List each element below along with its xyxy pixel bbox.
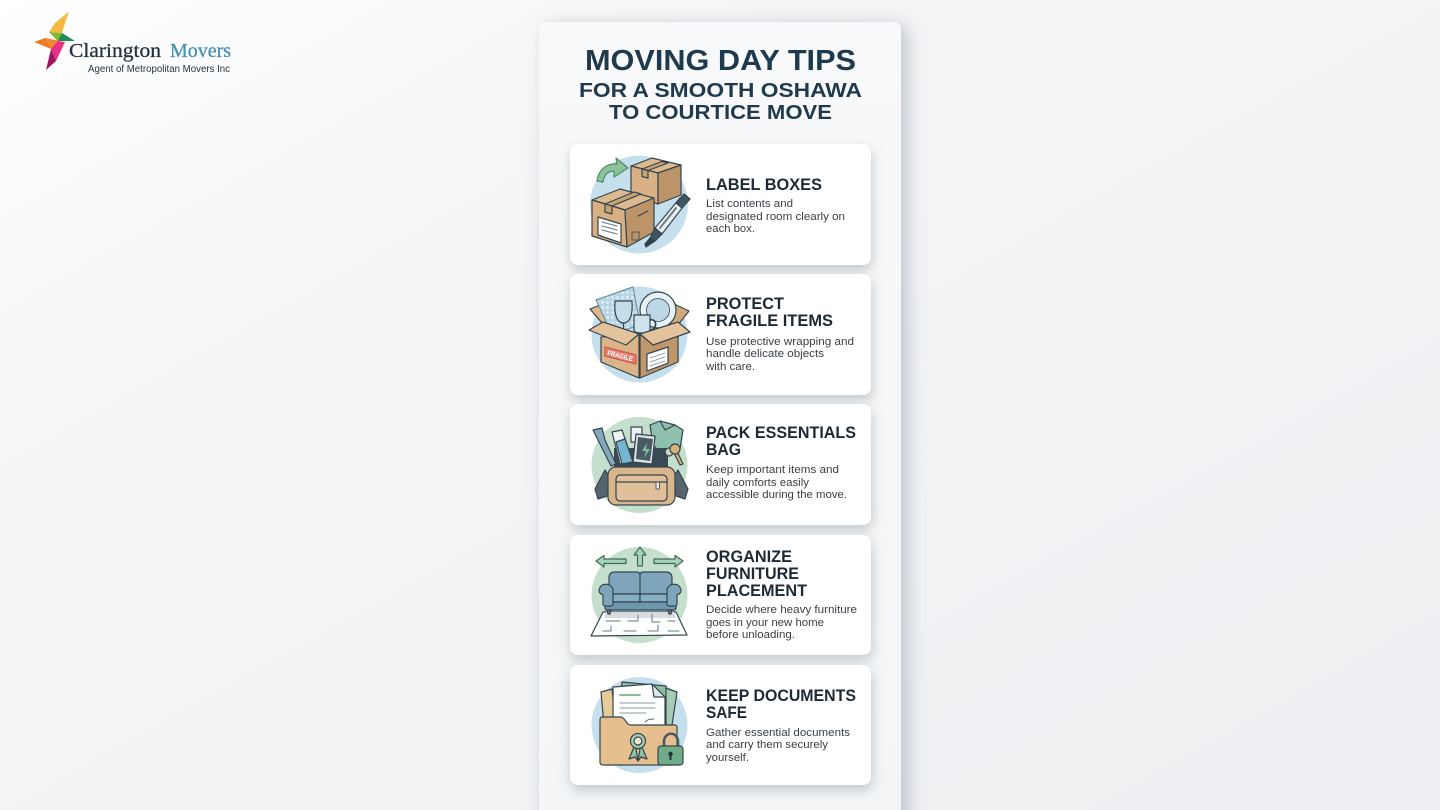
- logo name accent: Movers: [170, 40, 231, 62]
- description: [705, 336, 854, 373]
- icon: folder with documents and lock: [592, 677, 688, 773]
- description: [706, 727, 850, 764]
- description: Gather essential documents: [706, 727, 850, 739]
- arrow up: [634, 547, 646, 566]
- description: handle delicate objects: [706, 348, 824, 360]
- heading: FURNITURE: [706, 565, 799, 583]
- heading: [706, 424, 856, 459]
- card: organize furniture placement: [570, 535, 871, 655]
- panel: infographic sheet: [539, 22, 901, 810]
- description: yourself.: [706, 752, 749, 764]
- card: protect fragile items: [570, 274, 871, 395]
- description: designated room clearly on: [706, 211, 845, 223]
- description: goes in your new home: [706, 617, 824, 629]
- heading: PROTECT: [706, 295, 784, 313]
- heading: KEEP DOCUMENTS: [706, 687, 856, 705]
- logo tagline: Agent of Metropolitan Movers Inc: [88, 64, 230, 75]
- description: Decide where heavy furniture: [706, 604, 857, 616]
- card: pack essentials bag: [570, 404, 871, 525]
- heading: ORGANIZE: [706, 548, 792, 566]
- icon: open box with fragile items: FRAGILE: [607, 350, 634, 363]
- heading: PACK ESSENTIALS: [706, 424, 856, 442]
- heading: [706, 295, 833, 330]
- description: accessible during the move.: [706, 489, 847, 501]
- heading: PLACEMENT: [706, 582, 807, 600]
- card: label boxes: [570, 144, 871, 265]
- title line 1: MOVING DAY TIPS: [585, 45, 856, 77]
- icon: cardboard boxes and marker: [590, 156, 690, 254]
- heading: [706, 687, 856, 722]
- icon: open box with fragile items: [589, 286, 690, 382]
- description: before unloading.: [706, 629, 795, 641]
- description: [706, 604, 857, 641]
- icon: padlock: [658, 734, 683, 765]
- heading: FRAGILE ITEMS: [706, 312, 833, 330]
- logo name: Clarington: [69, 40, 161, 62]
- heading: BAG: [706, 441, 741, 459]
- description: List contents and: [706, 198, 793, 210]
- heading: LABEL BOXES: [706, 176, 822, 194]
- arrow left: [596, 556, 626, 567]
- icon: ribbon seal: [629, 734, 647, 761]
- description: Use protective wrapping and: [706, 336, 854, 348]
- description: [706, 198, 845, 235]
- icon: logo star: [34, 12, 75, 70]
- description: each box.: [706, 223, 755, 235]
- title line 3: TO COURTICE MOVE: [609, 101, 832, 124]
- heading: SAFE: [706, 704, 747, 722]
- description: [706, 464, 847, 501]
- description: and carry them securely: [706, 739, 828, 751]
- card: keep documents safe: [570, 665, 871, 785]
- title: [579, 45, 862, 124]
- arrow right: [654, 556, 683, 567]
- description: with care.: [705, 361, 755, 373]
- icon: essentials bag: [592, 417, 688, 513]
- title line 2: FOR A SMOOTH OSHAWA: [579, 79, 862, 102]
- heading: [706, 548, 807, 600]
- description: daily comforts easily: [706, 477, 809, 489]
- logo: Clarington Movers: [34, 12, 231, 75]
- description: Keep important items and: [706, 464, 839, 476]
- icon: sofa on floor plan: [591, 547, 688, 643]
